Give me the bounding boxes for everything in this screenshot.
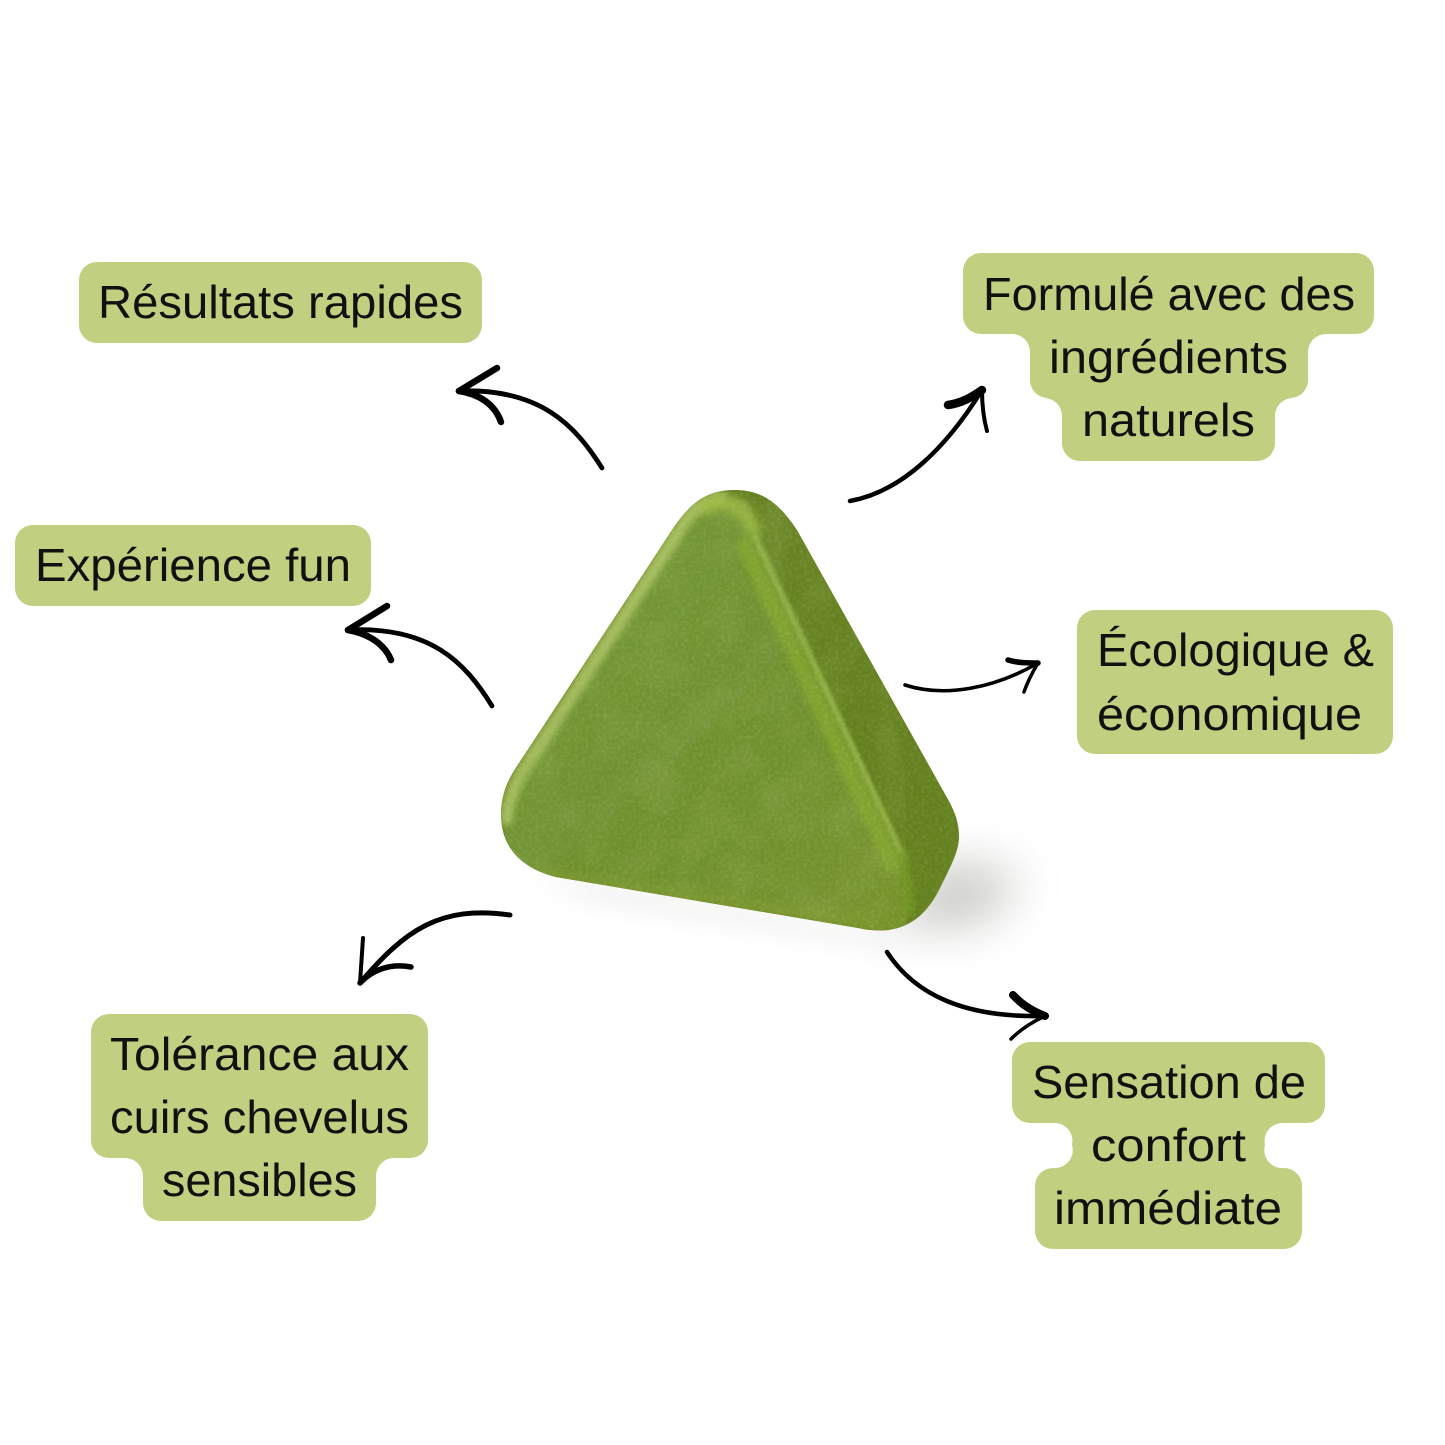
- right ridge band: [742, 540, 895, 870]
- label: Sensation de confort immédiate: confort: [1091, 1119, 1246, 1171]
- cast shadow: [530, 860, 1025, 945]
- arrow: to Écologique & économique: [905, 660, 1038, 692]
- lower right edge glow: [902, 850, 912, 915]
- bar body: [490, 480, 970, 940]
- label: Formulé avec des ingrédients naturels: ingrédients: [1049, 331, 1288, 383]
- label: Sensation de confort immédiate: [1012, 1042, 1325, 1249]
- front face: [500, 500, 912, 935]
- label: Expérience fun: [15, 525, 371, 606]
- bottom edge: [530, 872, 880, 925]
- right ridge highlight: [754, 535, 905, 860]
- label: Formulé avec des ingrédients naturels: Formulé avec des: [983, 268, 1355, 320]
- label: Écologique & économique: économique: [1097, 688, 1362, 740]
- label: Formulé avec des ingrédients naturels: [963, 253, 1374, 461]
- label: Écologique & économique: Écologique &: [1097, 624, 1374, 676]
- label: Tolérance aux cuirs chevelus sensibles: [91, 1014, 428, 1221]
- mottled surface: [542, 500, 902, 909]
- label: Formulé avec des ingrédients naturels: naturels: [1082, 394, 1255, 446]
- label: Expérience fun: Expérience fun: [35, 539, 351, 591]
- label: Résultats rapides: Résultats rapides: [98, 276, 463, 328]
- product: green triangular solid shampoo bar: [490, 480, 1025, 945]
- label: Sensation de confort immédiate: Sensation de: [1032, 1056, 1306, 1108]
- arrow: to Expérience fun: [348, 606, 492, 706]
- label: Tolérance aux cuirs chevelus sensibles: cuirs chevelus: [110, 1091, 409, 1143]
- left bevel highlight: [506, 497, 726, 825]
- top cap highlight: [700, 502, 755, 535]
- arrow: to Formulé avec des ingrédients naturels: [850, 390, 987, 501]
- arrow: to Tolérance aux cuirs chevelus sensibles: [360, 913, 510, 983]
- label: Résultats rapides: [79, 262, 482, 343]
- arrow: to Sensation de confort immédiate: [887, 952, 1045, 1039]
- label: Tolérance aux cuirs chevelus sensibles: Tolérance aux: [110, 1028, 409, 1080]
- label: Écologique & économique: [1077, 610, 1393, 754]
- label: Sensation de confort immédiate: immédiate: [1054, 1182, 1282, 1234]
- surface grain: [490, 480, 970, 940]
- label: Tolérance aux cuirs chevelus sensibles: sensibles: [162, 1154, 357, 1206]
- arrow: to Résultats rapides: [459, 368, 602, 468]
